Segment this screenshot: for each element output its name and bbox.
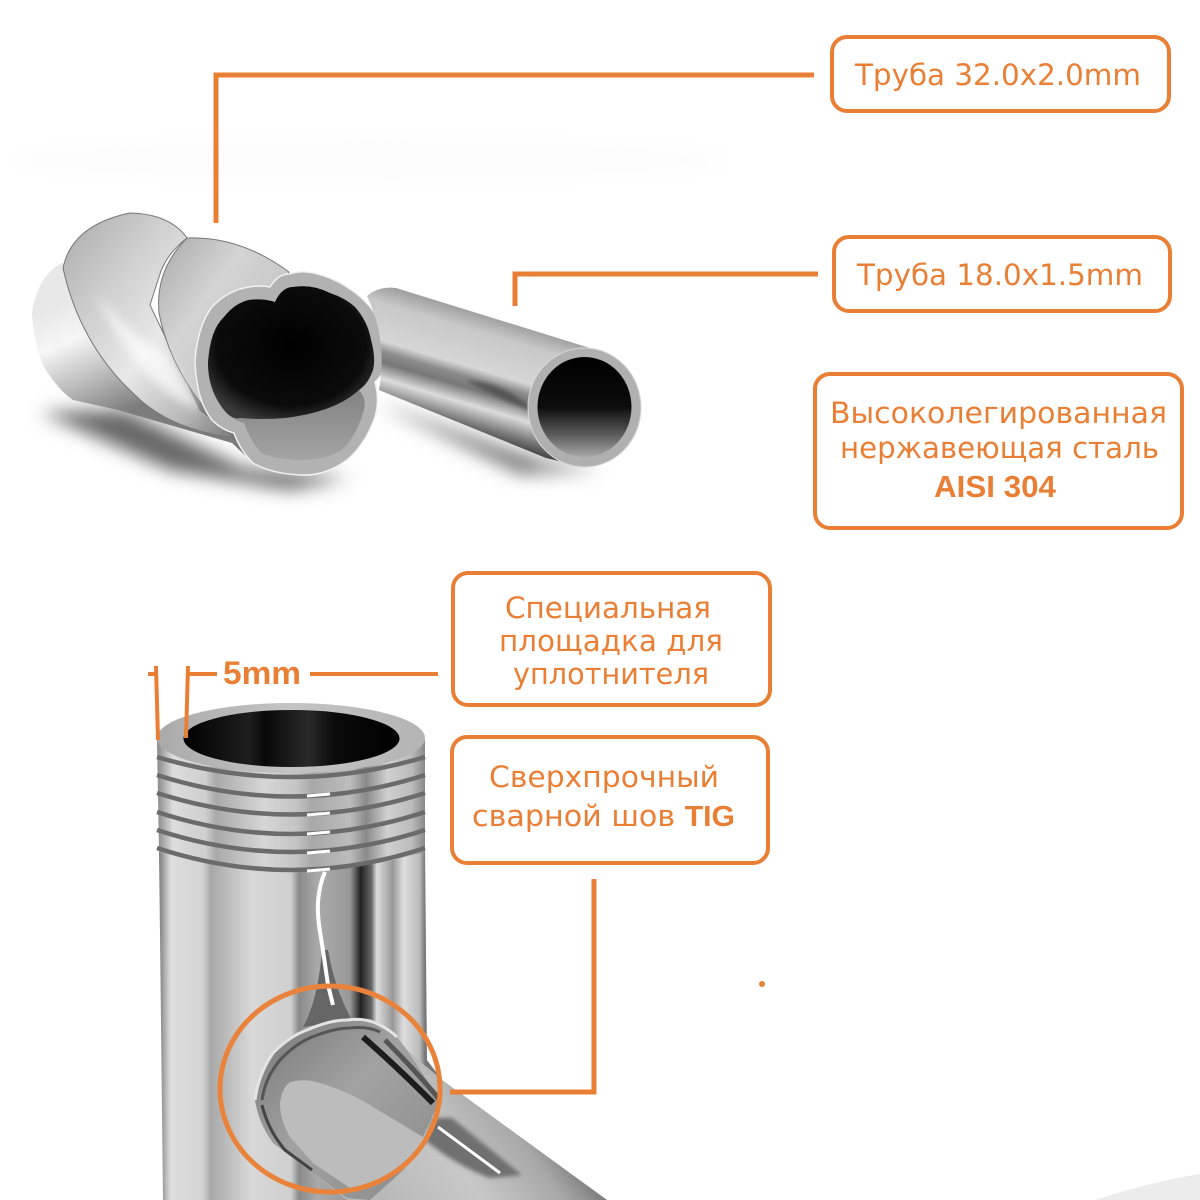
front lobe xyxy=(159,238,289,420)
callout: stainless steel: Высоколегированная xyxy=(830,396,1167,430)
callout: TIG weld: сварной шов TIG xyxy=(472,799,735,833)
callout: sealing area: Специальная xyxy=(505,591,711,625)
callout: TIG weld xyxy=(452,737,768,863)
callout: stainless steel xyxy=(815,374,1182,528)
callout: stainless steel: AISI 304 xyxy=(934,469,1057,504)
light oval inside branch xyxy=(280,1080,423,1190)
back lobe xyxy=(32,263,300,463)
fitting body xyxy=(159,845,607,1200)
dimension: 5mm: 5mm xyxy=(223,655,301,691)
branch streak xyxy=(425,1118,522,1178)
callout: pipe 32.0x2.0 xyxy=(832,37,1169,111)
weld seam running down body xyxy=(303,950,352,1027)
illustration: threaded tee fitting xyxy=(157,703,607,1200)
faint background smudge xyxy=(10,138,730,182)
callout ring around weld xyxy=(220,986,440,1192)
floor shadow under pipes xyxy=(40,402,600,490)
collar xyxy=(255,1019,440,1200)
callout: pipe 18.0x1.5: Труба 18.0x1.5mm xyxy=(856,258,1143,292)
middle lobe xyxy=(63,213,236,438)
branch pipe xyxy=(299,1050,607,1200)
soft highlight xyxy=(95,290,200,410)
open top of neck xyxy=(157,703,425,773)
leader: weld xyxy=(450,879,594,1092)
callout: pipe 18.0x1.5 xyxy=(834,237,1170,311)
thread grooves xyxy=(157,757,425,870)
illustration: straight pipe xyxy=(367,288,641,467)
callout: sealing area: площадка для xyxy=(499,624,723,658)
callout: pipe 32.0x2.0: Труба 32.0x2.0mm xyxy=(854,58,1141,92)
callout: sealing area xyxy=(453,573,770,705)
dimension: 5mm xyxy=(148,655,438,740)
callout: stainless steel: нержавеющая сталь xyxy=(840,431,1159,465)
callout: TIG weld: Сверхпрочный xyxy=(489,760,719,794)
leader: 32 mm pipe xyxy=(216,75,814,223)
pipe mouth dark interior xyxy=(208,286,374,419)
leader: 18 mm pipe xyxy=(515,274,818,306)
thread highlights xyxy=(307,794,330,871)
illustration: twisted pipe xyxy=(32,213,387,475)
threaded neck xyxy=(157,740,425,871)
pipe mouth lower interior xyxy=(208,286,374,460)
pipe mouth outer rim xyxy=(195,272,387,475)
callout: sealing area: уплотнителя xyxy=(513,657,709,691)
